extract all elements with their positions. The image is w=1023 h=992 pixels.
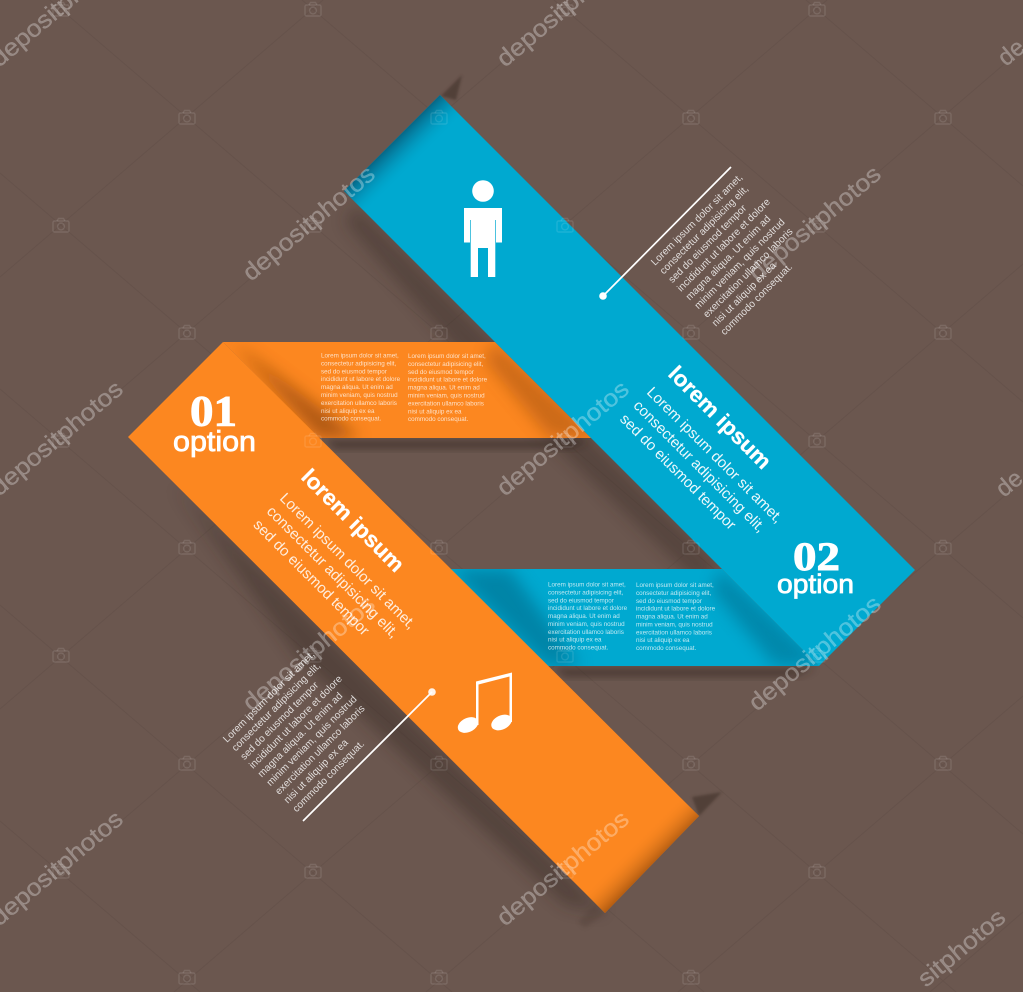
text block: orange column one: commodo consequat. [321,416,381,423]
watermark: depositphotos text: depositphotos [492,805,634,932]
panel: orange diagonal ribbon [128,342,699,913]
callout leader line [303,692,432,821]
text block: blue column one: magna aliqua. Ut enim ad [548,613,620,620]
text block: orange column one: incididunt ut labore et dolore [321,376,401,383]
text block: blue column two: nisi ut aliquip ex ea [636,637,690,644]
text block: orange column two: nisi ut aliquip ex ea [408,408,462,415]
number: 01: 01 [190,388,237,436]
text block: orange column one: magna aliqua. Ut enim ad [321,384,393,391]
text block: top right note: exercitation ullamco laboris [702,226,795,320]
text block: blue column two: Lorem ipsum dolor sit amet, [636,582,714,589]
text block: orange column one: Lorem ipsum dolor sit amet, [321,352,399,360]
text block: blue ribbon paragraph: Lorem ipsum dolor sit amet, [643,384,786,527]
panel: blue diagonal ribbon [344,95,915,666]
text block: bottom left note: minim veniam, quis nostrud [265,694,359,789]
text block: orange column one: exercitation ullamco laboris [321,400,397,407]
label: option 02: option [777,569,854,599]
watermark: depositphotos text: depositphotos [744,160,886,287]
text block: orange column one: minim veniam, quis nostrud [321,392,398,399]
text block: orange column one: nisi ut aliquip ex ea [321,408,375,415]
text block: bottom left note: consectetur adipisicing elit, [230,661,323,754]
watermark: depositphotos text: depositphotos [238,590,380,717]
text block: blue column two: commodo consequat. [636,645,696,652]
watermark: depositphotos text: depositphotos [744,590,886,717]
watermark: depositphotos text: depositphotos [492,375,634,502]
text block: orange column one: consectetur adipisicing elit, [321,360,397,367]
text block: orange ribbon paragraph: consectetur adipisicing elit, [263,503,402,642]
text block: blue column one: incididunt ut labore et dolore [548,605,628,612]
number: 02: 02 [793,534,840,579]
text block: bottom left note: Lorem ipsum dolor sit amet, [221,649,317,745]
label: option 01: option [173,426,256,458]
text block: top right note: sed do eiusmod tempor [667,203,750,286]
heading: orange ribbon lorem ipsum: lorem ipsum [296,464,410,577]
text block: blue column one: exercitation ullamco laboris [548,629,624,636]
text block: bottom left note: incididunt ut labore et dolore [247,673,345,771]
text block: bottom left note: commodo consequat. [291,739,367,815]
ribbon shadows on background [175,75,815,928]
icon: person [464,180,502,277]
text block: orange column two: Lorem ipsum dolor sit amet, [408,353,486,360]
watermark: depositphotos text: sitphotos [913,904,1011,992]
text block: orange ribbon paragraph: sed do eiusmod tempor [250,516,373,639]
text block: bottom left note: exercitation ullamco laboris [274,703,367,797]
text block: blue column two: sed do eiusmod tempor [636,598,702,605]
text block: orange column two: magna aliqua. Ut enim ad [408,385,480,392]
text block: blue column two: consectetur adipisicing elit, [636,590,712,597]
text block: orange column two: exercitation ullamco laboris [408,400,484,407]
text block: blue column two: magna aliqua. Ut enim ad [636,614,708,621]
text block: blue ribbon paragraph: consectetur adipisicing elit, [630,397,769,536]
text block: orange column two: minim veniam, quis nostrud [408,392,485,400]
text block: top right note: minim veniam, quis nostrud [693,217,787,312]
text block: blue column two: minim veniam, quis nostrud [636,621,713,628]
text block: orange column two: consectetur adipisicing elit, [408,361,484,368]
text block: orange column one: sed do eiusmod tempor [321,368,387,375]
text block: top right note: commodo consequat. [719,262,795,338]
watermark: depositphotos text: depositphotos [238,160,380,287]
text block: orange column two: commodo consequat. [408,416,468,423]
heading: blue ribbon lorem ipsum: lorem ipsum [663,361,777,474]
callout dot [428,688,436,696]
text block: bottom left note: sed do eiusmod tempor [239,680,322,763]
panel: orange back strip [223,342,600,438]
icon: music notes [455,672,514,736]
callout: top right note [599,167,817,338]
callout leader line [603,167,731,296]
text block: blue column one: commodo consequat. [548,645,608,652]
text block: blue column one: minim veniam, quis nostrud [548,621,625,628]
callout dot [599,292,607,300]
text block: bottom left note: nisi ut aliquip ex ea [282,737,351,806]
text block: blue ribbon paragraph: sed do eiusmod tempor [616,411,739,534]
text block: blue column two: exercitation ullamco laboris [636,629,712,636]
text block: top right note: nisi ut aliquip ex ea [710,260,779,329]
text block: top right note: incididunt ut labore et dolore [675,196,773,294]
text block: orange column two: incididunt ut labore et dolore [408,377,488,384]
callout: bottom left note [221,647,436,821]
panel: blue back strip [450,569,825,666]
text block: blue column one: Lorem ipsum dolor sit amet, [548,582,626,589]
text block: orange ribbon paragraph: Lorem ipsum dolor sit amet, [276,490,419,633]
text block: bottom left note: magna aliqua. Ut enim ad [256,691,345,780]
text block: blue column two: incididunt ut labore et dolore [636,606,716,613]
text block: blue column one: nisi ut aliquip ex ea [548,637,602,644]
text block: top right note: Lorem ipsum dolor sit amet, [649,172,745,268]
text block: top right note: consectetur adipisicing elit, [658,184,751,277]
text block: orange column two: sed do eiusmod tempor [408,369,474,376]
text block: top right note: magna aliqua. Ut enim ad [684,214,773,303]
text block: blue column one: consectetur adipisicing elit, [548,590,624,597]
text block: blue column one: sed do eiusmod tempor [548,597,614,604]
